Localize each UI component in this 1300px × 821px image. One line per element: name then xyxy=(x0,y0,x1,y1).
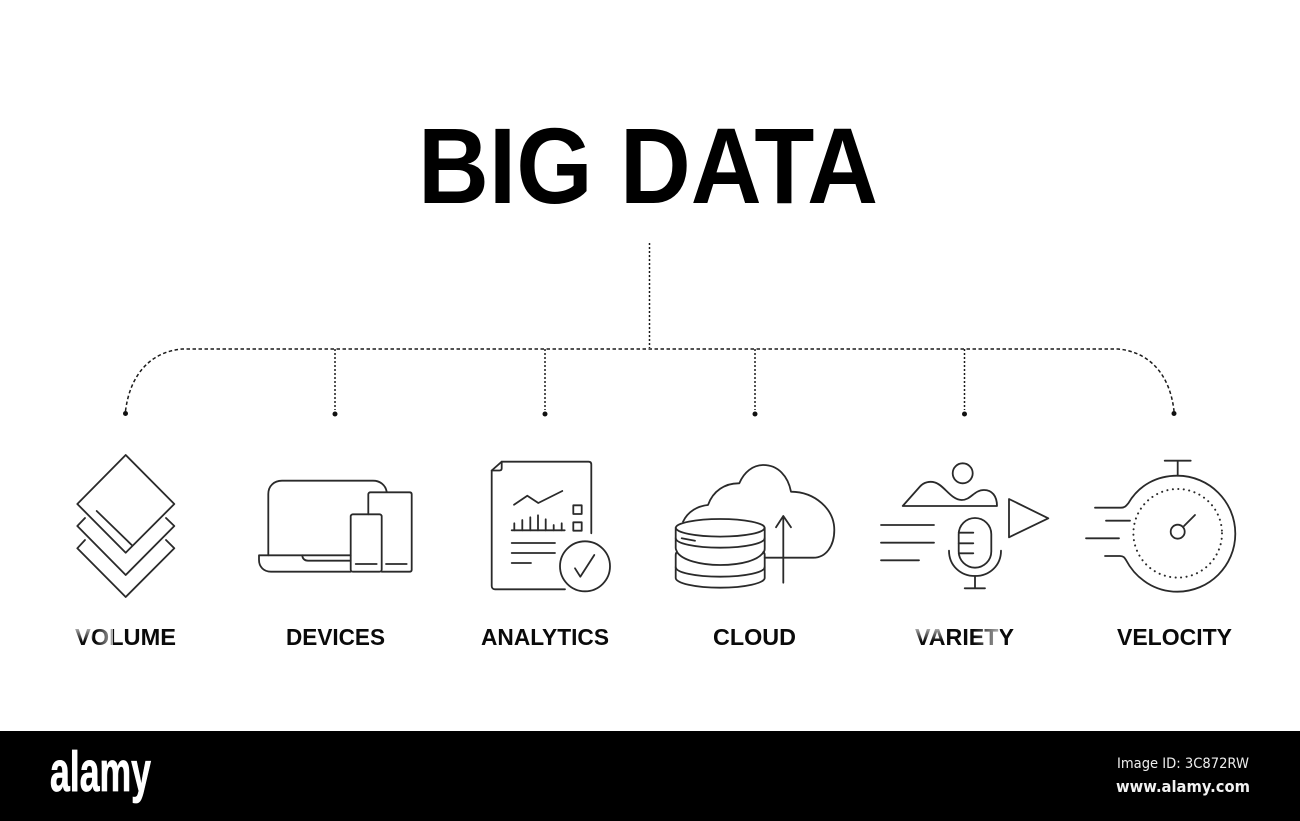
icon: devices xyxy=(259,481,412,572)
footer logo: alamy xyxy=(50,740,151,804)
footer band xyxy=(0,731,1300,821)
dotted connector tree xyxy=(123,243,1176,416)
footer url: www.alamy.com xyxy=(1116,777,1250,796)
icon: variety media xyxy=(881,463,1048,588)
icon: volume layers xyxy=(77,455,174,597)
icon: velocity stopwatch xyxy=(1086,461,1235,592)
icon: analytics report xyxy=(492,462,610,591)
label: velocity: VELOCITY xyxy=(1117,624,1232,650)
icon: cloud database xyxy=(676,465,834,588)
label: volume: VOLUME xyxy=(75,624,176,650)
footer image id: Image ID: 3C872RW xyxy=(1117,756,1249,772)
label: cloud: CLOUD xyxy=(713,624,796,650)
label: variety: VARIETY xyxy=(915,624,1014,650)
label: analytics: ANALYTICS xyxy=(481,624,609,650)
label: devices: DEVICES xyxy=(286,624,385,650)
title: BIG DATA xyxy=(418,105,878,226)
